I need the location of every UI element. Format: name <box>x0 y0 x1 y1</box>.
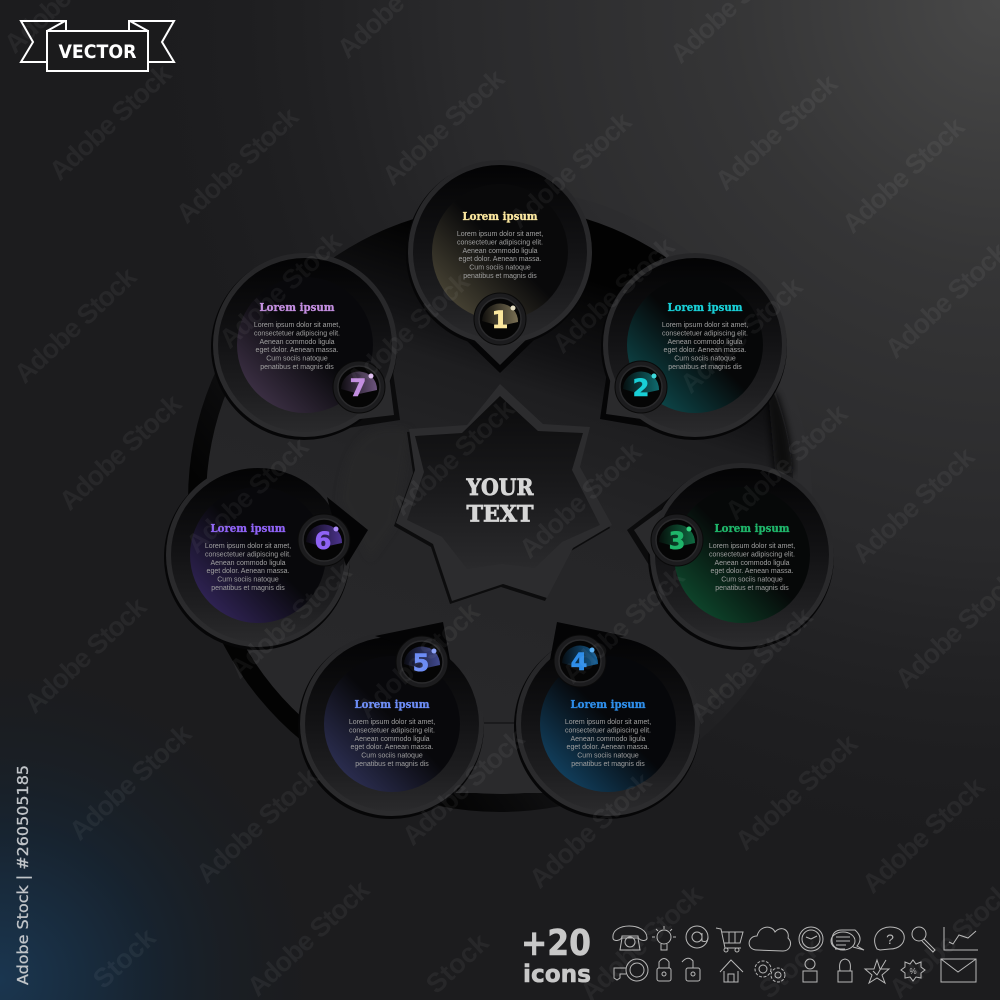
panel 6: Aenean commodo ligula <box>210 560 286 567</box>
watermark: Adobe Stock <box>556 561 691 689</box>
watermark: Adobe Stock <box>513 436 648 564</box>
watermark: Adobe Stock <box>719 398 854 526</box>
icon: lock <box>657 958 671 981</box>
panel 3 <box>627 463 834 650</box>
panel 2: Lorem ipsum dolor sit amet, <box>662 322 748 329</box>
panel 5: eget dolor. Aenean massa. <box>351 744 433 751</box>
panel 4: Lorem ipsum <box>570 698 646 711</box>
panel 4: Aenean commodo ligula <box>570 736 646 743</box>
watermark: Stock <box>87 922 162 994</box>
badge 3: 3 <box>669 527 685 555</box>
panel 1: eget dolor. Aenean massa. <box>459 256 541 263</box>
panel 3: Lorem ipsum <box>714 522 790 535</box>
large background ring and disc <box>188 188 812 812</box>
panel 1: Aenean commodo ligula <box>462 248 538 255</box>
icon: light bulb <box>652 926 676 950</box>
panel 7: Aenean commodo ligula <box>259 339 335 346</box>
badge 7 <box>333 361 385 413</box>
panel 3: consectetuer adipiscing elit. <box>709 551 795 558</box>
panel 7: eget dolor. Aenean massa. <box>256 347 338 354</box>
badge 2: 2 <box>633 374 649 402</box>
badge 5: 5 <box>413 649 429 677</box>
watermark: Adobe Stock <box>503 106 638 234</box>
panel 3: Lorem ipsum dolor sit amet, <box>709 543 795 550</box>
panel 5 <box>298 622 484 819</box>
badge 4 <box>554 635 606 687</box>
panel 1 <box>406 160 592 373</box>
panel 1: Lorem ipsum <box>462 210 538 223</box>
watermark: Adobe Stock <box>729 728 864 856</box>
icon: percent burst: % <box>909 967 917 976</box>
icon: percent burst <box>901 960 925 981</box>
panel 6: Cum sociis natoque <box>217 577 279 584</box>
watermark: Adobe Stock <box>8 261 143 389</box>
watermark: Adobe Stock <box>386 393 521 521</box>
panel 7: Cum sociis natoque <box>266 356 328 363</box>
watermark: Adobe Stock <box>546 231 681 359</box>
panel 3: penatibus et magnis dis <box>715 585 789 592</box>
watermark: Adobe Stock <box>43 58 178 186</box>
centre text: YOUR <box>466 475 534 501</box>
panel 1: consectetuer adipiscing elit. <box>457 239 543 246</box>
watermark: Adobe Stock <box>674 271 809 399</box>
icon: open lock <box>682 958 700 981</box>
panel 3: Cum sociis natoque <box>721 577 783 584</box>
+20 icons label <box>521 923 591 988</box>
panel 2: Cum sociis natoque <box>674 356 736 363</box>
panel 6: consectetuer adipiscing elit. <box>205 551 291 558</box>
watermark: Stock <box>420 927 495 999</box>
watermark: Adobe Stock <box>709 68 844 196</box>
watermark: Adobe Stock <box>213 226 348 354</box>
panel 2: penatibus et magnis dis <box>668 364 742 371</box>
icon: magnifier <box>912 927 935 952</box>
panel 3: Aenean commodo ligula <box>714 560 790 567</box>
badge 3 <box>651 514 703 566</box>
panel 5: Lorem ipsum dolor sit amet, <box>349 719 435 726</box>
watermark: Adobe Stock <box>341 266 476 394</box>
badge 6 <box>298 514 350 566</box>
panel 7: penatibus et magnis dis <box>260 364 334 371</box>
watermark: Adobe Stock <box>351 596 486 724</box>
panel 7: Lorem ipsum <box>260 301 335 314</box>
watermark: Adobe Stock <box>180 431 315 559</box>
icon: star with check <box>865 960 889 983</box>
icon: at sign <box>686 926 708 948</box>
panel 2: Lorem ipsum <box>668 301 743 314</box>
icon: question bubble <box>875 927 904 950</box>
icon: telephone <box>613 926 647 950</box>
panel 7: Lorem ipsum dolor sit amet, <box>254 322 340 329</box>
badge 1: 1 <box>492 306 508 334</box>
icon: woman <box>838 959 852 982</box>
badge 4: 4 <box>571 648 587 676</box>
panel 2: eget dolor. Aenean massa. <box>664 347 746 354</box>
centre text: TEXT <box>466 502 534 528</box>
panel 2: consectetuer adipiscing elit. <box>662 330 748 337</box>
watermark: Adobe Stock <box>684 601 819 729</box>
panel 4: Lorem ipsum dolor sit amet, <box>565 719 651 726</box>
watermark: Adobe Stock <box>523 766 658 894</box>
panel 5: Aenean commodo ligula <box>354 736 430 743</box>
watermark: Adobe Stock <box>190 761 325 889</box>
panel 3: eget dolor. Aenean massa. <box>711 568 793 575</box>
panel 5: penatibus et magnis dis <box>355 761 429 768</box>
panel 4 <box>514 622 700 819</box>
watermark: Adobe Stock <box>846 441 981 569</box>
panel 1: Lorem ipsum dolor sit amet, <box>457 231 543 238</box>
icon: question bubble: ? <box>886 931 894 947</box>
panel 7 <box>211 253 400 440</box>
panel 5: Cum sociis natoque <box>361 753 423 760</box>
icon row <box>613 926 978 983</box>
icon: key <box>614 959 648 981</box>
watermark: Adobe Stock <box>63 718 198 846</box>
icon: envelope <box>941 959 976 982</box>
icon: cloud <box>749 927 790 951</box>
centre text <box>466 475 534 528</box>
watermark: Adobe Stock <box>856 771 991 899</box>
panel 4: Cum sociis natoque <box>577 753 639 760</box>
icon: cart <box>716 928 743 952</box>
badge 2 <box>615 361 667 413</box>
panel 5: consectetuer adipiscing elit. <box>349 727 435 734</box>
panel 1: Cum sociis natoque <box>469 265 531 272</box>
icon: clock <box>799 927 823 951</box>
vector ribbon badge: VECTOR <box>58 41 137 63</box>
watermark: Adobe Stock <box>18 591 153 719</box>
vector ribbon badge <box>21 21 174 71</box>
icon: man <box>803 959 817 982</box>
panel 2 <box>600 253 787 440</box>
watermark: Adobe Stock <box>376 63 511 191</box>
watermark: Adobe Stock <box>223 556 358 684</box>
+20 icons label: +20 <box>521 923 591 964</box>
watermark: Adobe Stock <box>836 111 971 239</box>
panel 4: eget dolor. Aenean massa. <box>567 744 649 751</box>
panel 5: Lorem ipsum <box>354 698 430 711</box>
panel 7: consectetuer adipiscing elit. <box>254 330 340 337</box>
panel 4: consectetuer adipiscing elit. <box>565 727 651 734</box>
centre star <box>394 384 612 604</box>
panel 4: penatibus et magnis dis <box>571 761 645 768</box>
+20 icons label: icons <box>523 960 591 988</box>
icon: line chart <box>944 927 978 950</box>
panel 6: Lorem ipsum dolor sit amet, <box>205 543 291 550</box>
badge 6: 6 <box>315 527 331 555</box>
panel 2: Aenean commodo ligula <box>667 339 743 346</box>
watermark: Adobe Stock <box>170 101 305 229</box>
panel 6: Lorem ipsum <box>210 522 286 535</box>
watermark: Adobe Stock <box>241 874 376 1000</box>
icon: chat bubbles <box>831 930 864 950</box>
panel 1: penatibus et magnis dis <box>463 273 537 280</box>
panel 6: penatibus et magnis dis <box>211 585 285 592</box>
icon: gears <box>755 961 785 982</box>
panel 6: eget dolor. Aenean massa. <box>207 568 289 575</box>
watermark: Adobe Stock <box>53 388 188 516</box>
panel 6 <box>164 463 368 650</box>
badge 5 <box>396 636 448 688</box>
badge 1 <box>474 293 526 345</box>
stock id vertical caption: Adobe Stock | #260505185 <box>14 765 32 985</box>
icon: house <box>720 960 743 982</box>
watermark: Adobe Stock <box>396 723 531 851</box>
badge 7: 7 <box>350 374 366 402</box>
